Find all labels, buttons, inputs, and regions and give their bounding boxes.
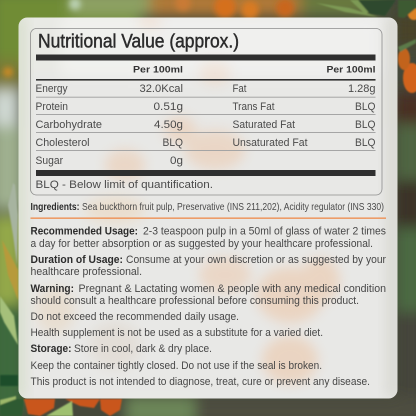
recommended usage xyxy=(30,226,386,250)
recommended usage: a day for better absorption or as suggested by your healthcare professional. xyxy=(30,238,373,250)
right nutrition rows: BLQ xyxy=(355,101,376,113)
left nutrition rows xyxy=(36,83,183,167)
daily usage note: Do not exceed the recommended daily usage. xyxy=(30,311,239,323)
left nutrition rows: Cholesterol xyxy=(36,137,90,149)
duration of usage: Duration of Usage: xyxy=(30,254,123,266)
disclaimer: This product is not intended to diagnose, treat, cure or prevent any disease. xyxy=(30,376,370,388)
warning: Warning: xyxy=(30,283,74,295)
right nutrition rows: Fat xyxy=(232,83,246,95)
duration of usage: healthcare professional. xyxy=(30,266,142,278)
duration of usage xyxy=(30,254,386,278)
left nutrition rows: 0g xyxy=(170,155,183,167)
right nutrition rows: Unsaturated Fat xyxy=(232,137,308,149)
column headers: Per 100ml xyxy=(133,64,183,76)
storage: Storage: xyxy=(30,343,72,355)
warning: should consult a healthcare professional before consuming this product. xyxy=(30,295,359,307)
storage: Store in cool, dark & dry place. xyxy=(74,343,212,355)
left nutrition rows: BLQ xyxy=(162,137,183,149)
right nutrition rows: 1.28g xyxy=(348,83,376,95)
left nutrition rows: 4.50g xyxy=(154,119,183,131)
column headers: Per 100ml xyxy=(326,64,376,76)
title: Nutritional Value (approx.) xyxy=(38,32,239,52)
column headers xyxy=(133,64,376,76)
recommended usage: 2-3 teaspoon pulp in a 50ml of glass of water 2 times xyxy=(143,226,386,238)
footnote: BLQ - Below limit of quantification. xyxy=(36,179,213,191)
left nutrition rows: Carbohydrate xyxy=(36,119,102,131)
left nutrition rows: 32.0Kcal xyxy=(140,83,183,95)
right nutrition rows xyxy=(232,83,376,149)
left nutrition rows: Protein xyxy=(36,101,68,113)
supplement note: Health supplement is not be used as a substitute for a varied diet. xyxy=(30,327,323,339)
left nutrition rows: Energy xyxy=(36,83,68,95)
right nutrition rows: Trans Fat xyxy=(232,101,274,113)
right nutrition rows: Saturated Fat xyxy=(232,119,295,131)
warning: Pregnant & Lactating women & people with any medical condition xyxy=(78,283,386,295)
top bar xyxy=(36,54,376,60)
left nutrition rows: 0.51g xyxy=(154,101,183,113)
bottom bar xyxy=(36,170,376,176)
ingredients: Ingredients: xyxy=(30,201,80,213)
storage xyxy=(30,343,212,355)
container note: Keep the container tightly closed. Do not use if the seal is broken. xyxy=(30,360,322,372)
right nutrition rows: BLQ xyxy=(355,119,376,131)
warning xyxy=(30,283,386,307)
orange divider xyxy=(30,218,386,219)
right nutrition rows: BLQ xyxy=(355,137,376,149)
duration of usage: Consume at your own discretion or as suggested by your xyxy=(126,254,386,266)
left nutrition rows: Sugar xyxy=(36,155,63,167)
nutrition box xyxy=(30,28,382,195)
recommended usage: Recommended Usage: xyxy=(30,226,138,238)
